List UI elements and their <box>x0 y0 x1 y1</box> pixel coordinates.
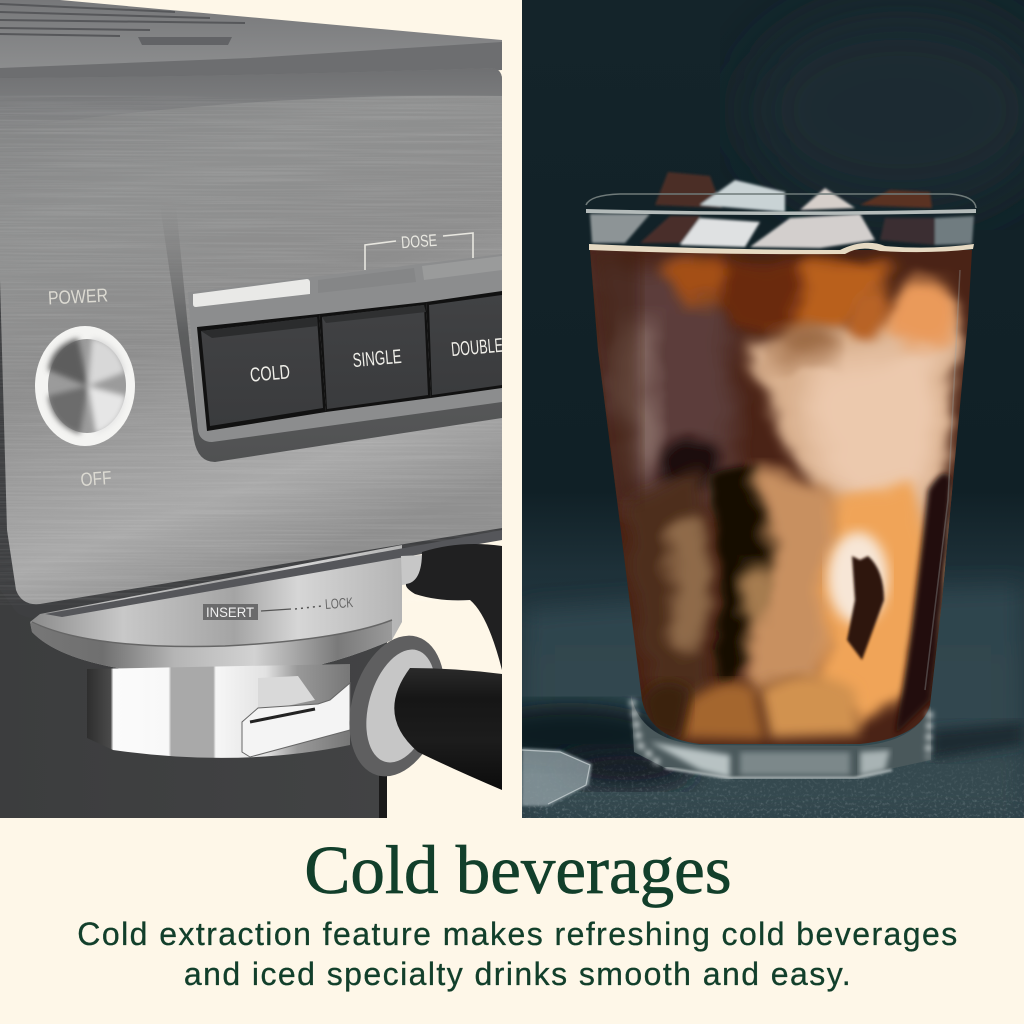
button: single <box>319 302 431 412</box>
coffee and milk swirl <box>580 245 980 755</box>
button: cold: COLD <box>249 361 291 387</box>
control recess panel <box>164 234 502 462</box>
panel: espresso machine photo <box>0 0 504 818</box>
group head collar: LOCK <box>324 594 354 612</box>
description text: and iced specialty drinks smooth and easy. <box>184 956 852 992</box>
steam wand knob <box>401 555 424 585</box>
glass <box>580 172 980 778</box>
label: power: POWER <box>48 285 109 310</box>
button: double <box>426 291 504 398</box>
indicator lights <box>193 256 502 307</box>
foam line <box>589 243 974 254</box>
glass rim <box>586 194 976 208</box>
machine lower body <box>0 590 387 818</box>
description text <box>77 916 959 992</box>
ice shard on table <box>522 748 592 806</box>
icon: power knob <box>35 326 135 446</box>
group head collar: INSERT <box>206 604 254 620</box>
label: dose bracket <box>365 231 473 270</box>
handle collar ring <box>349 636 442 776</box>
title: Cold beverages <box>304 832 732 908</box>
machine top plate <box>0 0 502 78</box>
machine steel front <box>0 68 502 618</box>
glass octagonal base <box>631 695 931 778</box>
label: dose bracket: DOSE <box>400 231 438 252</box>
ice cubes <box>590 172 974 248</box>
glass walls <box>925 270 960 690</box>
label: off: OFF <box>80 468 112 491</box>
portafilter <box>87 544 502 790</box>
slate table <box>470 585 1024 818</box>
button: single: SINGLE <box>352 346 402 372</box>
dark background glow <box>782 38 1018 182</box>
button: double: DOUBLE <box>450 335 504 361</box>
panel: iced coffee photo <box>470 0 1024 818</box>
group head collar <box>30 530 502 677</box>
button: cold <box>197 314 326 431</box>
description text: Cold extraction feature makes refreshing cold beverages <box>77 916 959 952</box>
